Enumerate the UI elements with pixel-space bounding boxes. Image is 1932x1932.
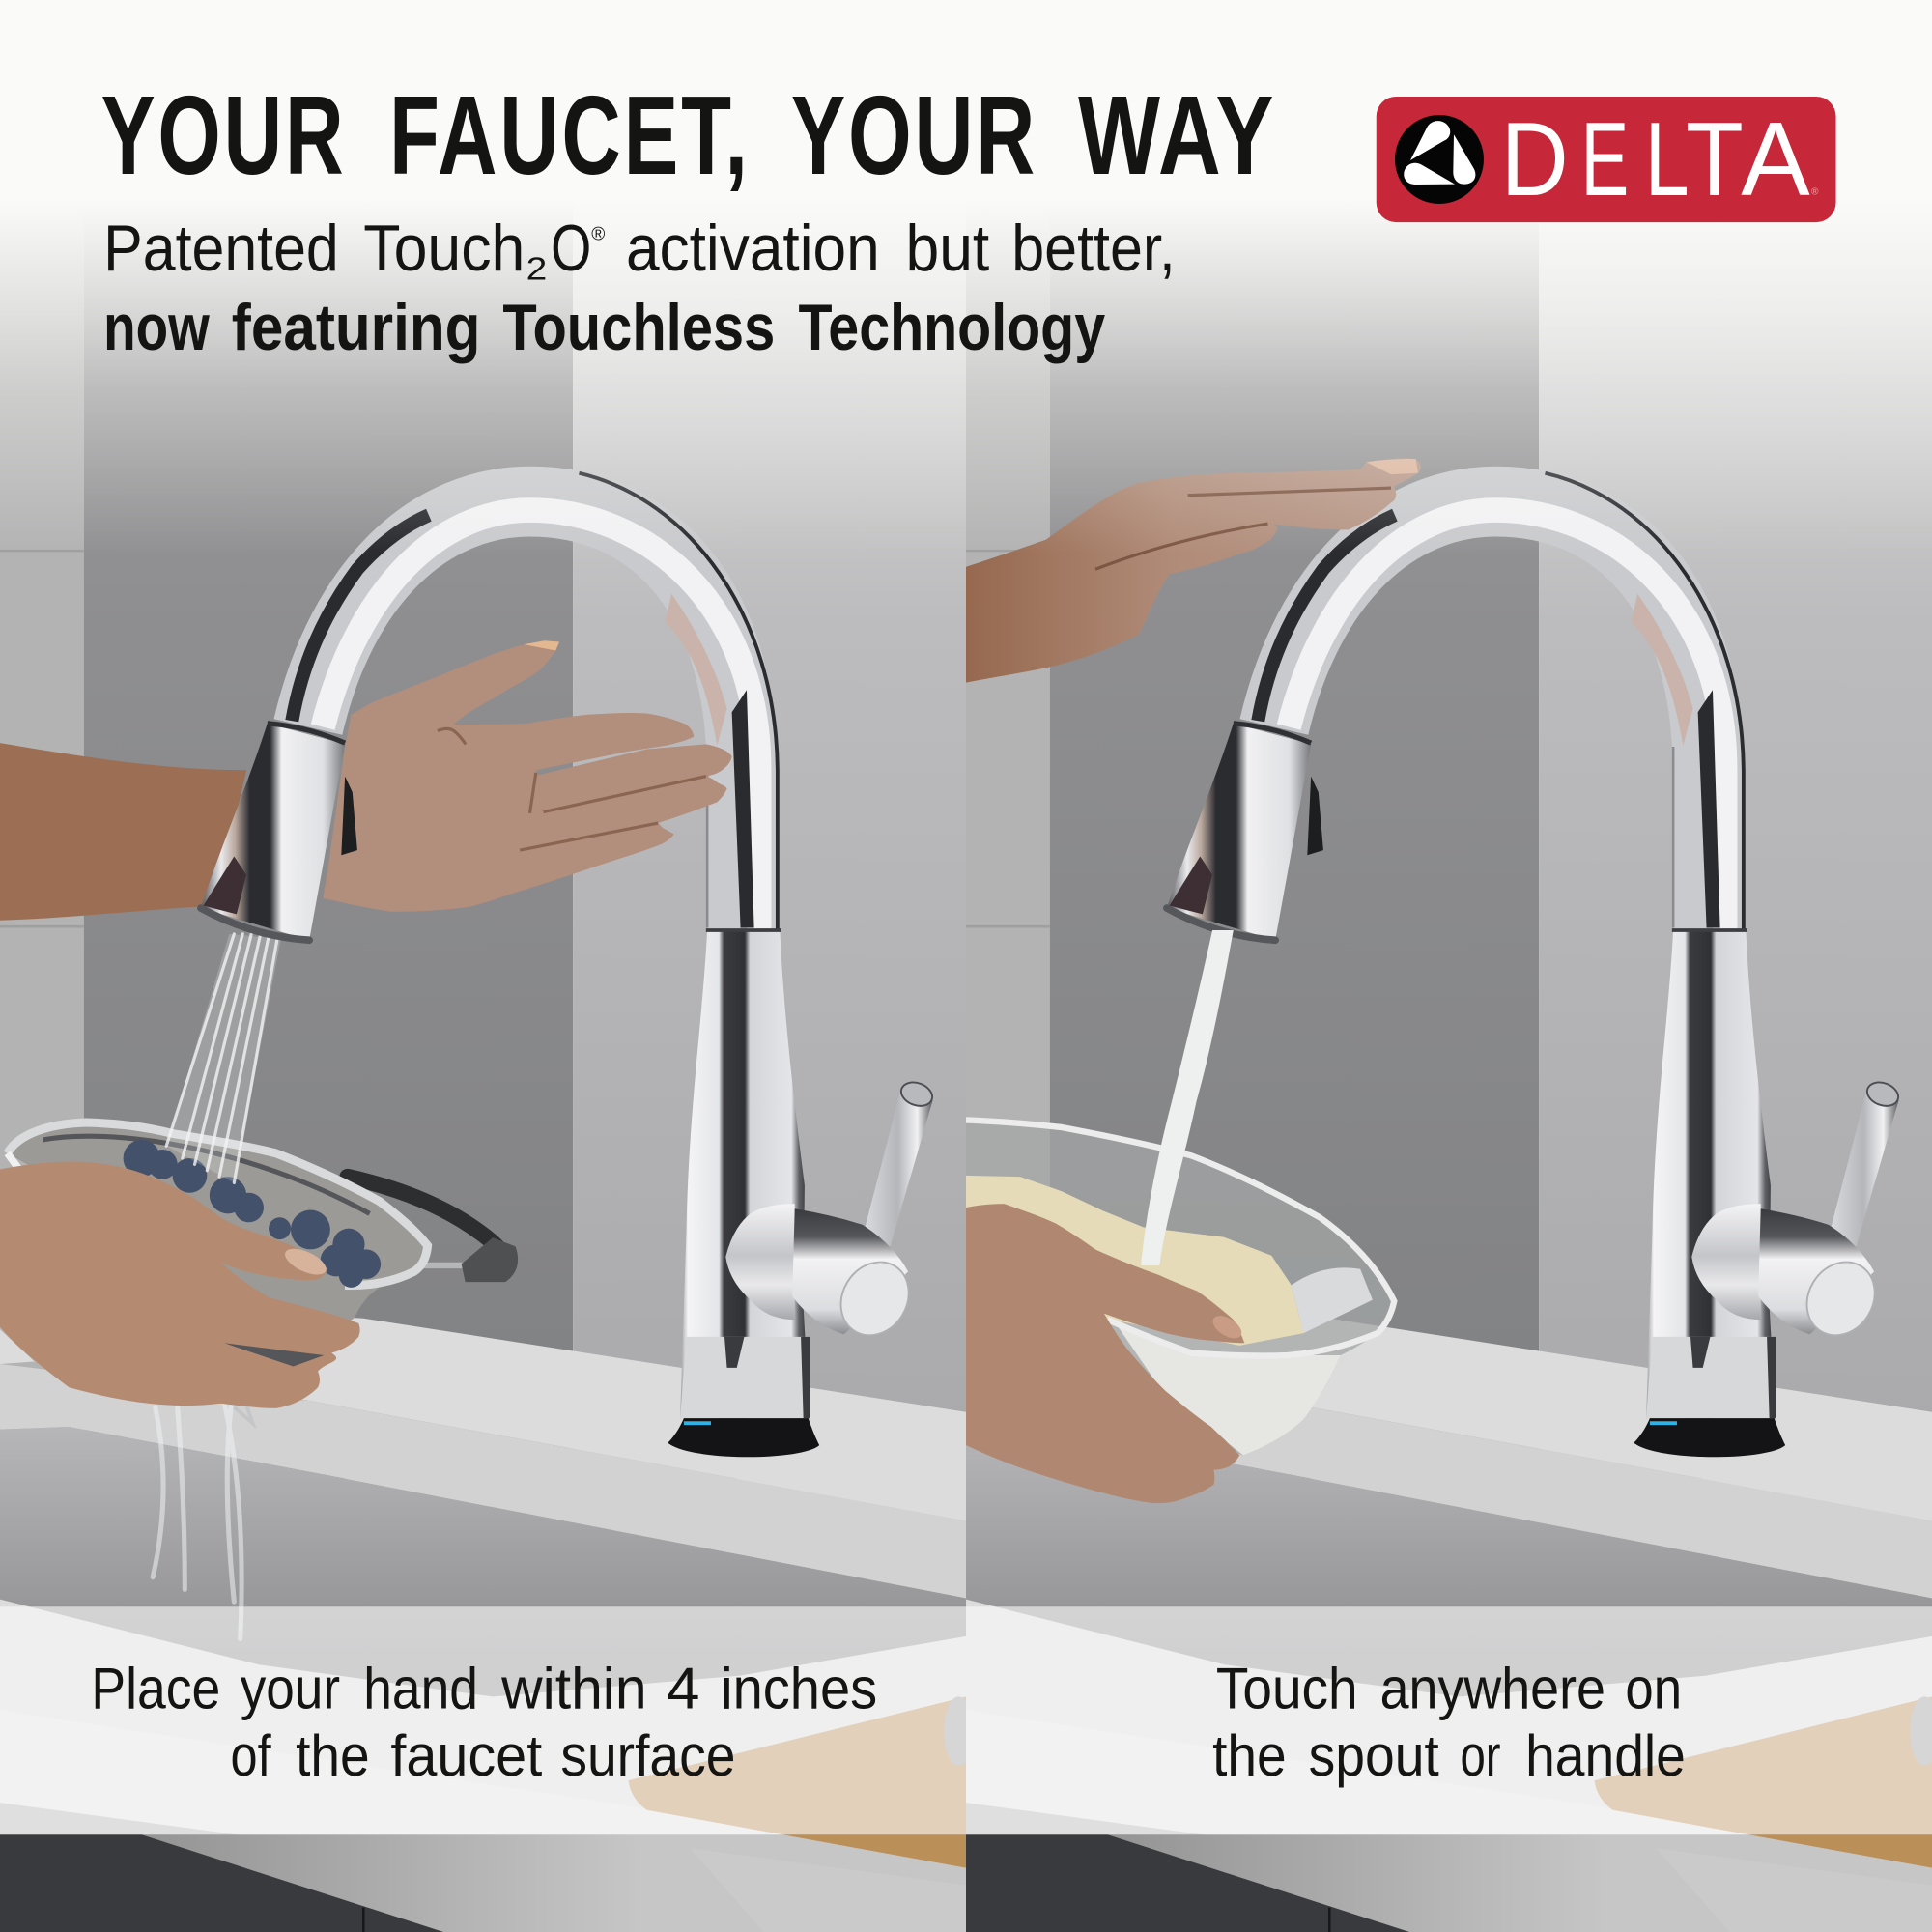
kitchen scene left [0,227,966,1932]
wordmark: L [1645,100,1690,217]
title: FAUCET, [389,72,751,198]
thumb nail [524,640,559,650]
caption text right line two: spout [1309,1723,1439,1788]
caption text left line two: of [231,1723,271,1788]
spray head left [201,724,357,940]
subtitle line one: 2 [526,252,547,288]
title: YOUR [791,72,1037,198]
fingernail [1213,1316,1242,1339]
icon: Delta triangle mark [1395,115,1484,204]
water stream [1141,930,1234,1265]
wordmark: E [1580,100,1629,217]
top white fade [0,0,1932,554]
caption text left line two: faucet [390,1723,543,1788]
caption text left line one: inches [721,1656,877,1720]
caption text left line two: the [296,1723,370,1788]
hand under strainer [0,1161,360,1423]
subtitle line two: Touchless [502,292,775,364]
logo: Delta [1377,97,1836,222]
title: WAY [1078,72,1276,198]
faucet spout and body left [292,473,935,1457]
wordmark: D [1501,100,1569,217]
caption text left line one: within [500,1656,647,1720]
caption text left line two: surface [560,1723,735,1788]
glass bowl [966,1120,1394,1455]
wordmark [1501,100,1810,217]
panel: touchless activation [0,227,966,1932]
panel: touch activation [966,227,1932,1932]
hand near spray [323,640,732,912]
mesh between fingers [224,1343,324,1367]
caption text right line two: the [1212,1723,1287,1788]
arm near spray [0,743,246,921]
subtitle line one: O [551,213,591,285]
caption text left line one: Place [91,1656,220,1720]
subtitle line two: featuring [232,292,480,364]
subtitle line one: Patented [103,213,339,285]
caption band right [966,1606,1932,1834]
caption text left line one: your [241,1656,340,1720]
title [101,72,1276,198]
upper hand [966,458,1421,683]
water stream [153,934,281,1638]
fingernail [285,1248,327,1275]
subtitle line two: Technology [799,292,1105,364]
title: YOUR [101,72,346,198]
strainer handle [348,1177,517,1282]
caption text left line two [231,1723,735,1788]
subtitle line two [103,292,1105,364]
wordmark: T [1686,100,1744,217]
caption band left [0,1606,966,1834]
caption text right line one: on [1625,1656,1682,1720]
subtitle line one: better, [1011,213,1176,285]
caption text right line one: anywhere [1380,1656,1605,1720]
caption text right line one [1216,1656,1682,1720]
lower hand [966,1204,1245,1503]
finger creases [438,728,706,850]
caption text left line one: 4 [667,1656,699,1720]
caption text right line two: or [1460,1723,1501,1788]
kitchen scene right [966,227,1932,1932]
caption text right line one: Touch [1216,1656,1358,1720]
subtitle line one: activation [626,213,880,285]
logo: Delta: ® [1811,187,1819,198]
wordmark: A [1741,100,1810,217]
caption text left line one [91,1656,877,1720]
faucet right [1167,473,1901,1457]
subtitle line one [103,213,1176,288]
subtitle line one: Touch [363,213,525,285]
subtitle line one: ® [591,225,605,245]
caption text right line two: handle [1525,1723,1686,1788]
caption text right line two [1212,1723,1686,1788]
caption text left line one: hand [363,1656,478,1720]
subtitle line one: but [906,213,989,285]
subtitle line two: now [103,292,210,364]
strainer with blueberries [4,1119,433,1321]
finger creases [1095,488,1391,569]
